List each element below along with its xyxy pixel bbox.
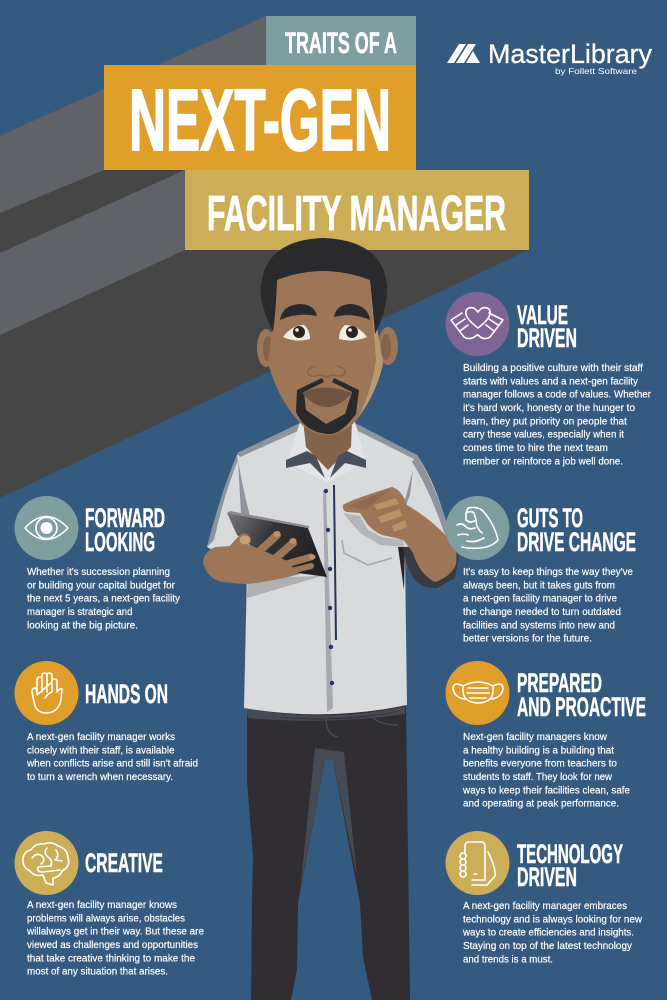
panel: creative [14, 831, 204, 978]
body text: a next-gen facility manager to drive [463, 593, 617, 605]
body text [26, 731, 198, 783]
body text: and operating at peak performance. [463, 798, 619, 810]
icon: flexed bicep [446, 496, 510, 560]
body text: Staying on top of the latest technology [463, 940, 633, 952]
body text: always been, but it takes guts from [463, 579, 615, 591]
body text: Next-gen facility managers know [463, 731, 607, 743]
heading [517, 300, 577, 353]
heading: CREATIVE [85, 848, 163, 878]
panel: guts to drive change [446, 496, 636, 645]
panel: technology driven [446, 831, 642, 965]
ears [257, 327, 398, 367]
body text: to turn a wrench when necessary. [27, 771, 173, 783]
body text: comes time to hire the next team [463, 442, 608, 454]
title block: traits of a [266, 16, 416, 65]
title block: next-gen: NEXT-GEN [129, 72, 391, 169]
title block: facility manager [185, 170, 529, 250]
panel: value driven [446, 292, 651, 467]
body text: a healthy building is a building that [463, 744, 614, 756]
body text: technology and is always looking for new [463, 913, 642, 925]
icon: hands holding a heart [446, 292, 510, 356]
title block: next-gen [104, 65, 416, 170]
body text: benefits everyone from teachers to [463, 758, 617, 770]
body text: carry these values, especially when it [463, 429, 624, 441]
body text: the next 5 years, a next-gen facility [27, 593, 181, 605]
body text: ways to create efficiencies and insights. [462, 927, 634, 939]
body text: facilities and systems into new and [463, 619, 615, 631]
body text: the change needed to turn outdated [463, 606, 621, 618]
body text [463, 566, 633, 645]
panel: prepared and proactive [446, 661, 646, 810]
heading: LOOKING [85, 527, 155, 557]
trousers [247, 705, 410, 1000]
heading [517, 503, 636, 557]
icon: hand [14, 661, 78, 725]
body text: Building a positive culture with their staff [463, 362, 643, 374]
goatee and mouth [296, 378, 359, 434]
heading: GUTS TO [517, 503, 583, 533]
body text: when conflicts arise and still isn't afraid [26, 758, 198, 770]
logo: MasterLibrary: by Follett Software [555, 67, 638, 76]
title [104, 16, 529, 250]
tablet [227, 511, 327, 577]
heading [517, 668, 646, 722]
eyes [283, 325, 367, 341]
body text: Whether it's succession planning [27, 566, 170, 578]
heading: PREPARED [517, 668, 602, 698]
diagonal shadow bands [0, 16, 529, 498]
icon: hand holding a smartphone [446, 831, 510, 895]
body text [27, 566, 181, 631]
body text: closely with their staff, is available [27, 744, 175, 756]
body text: It's easy to keep things the way they've [463, 566, 633, 578]
body text: that take creative thinking to make the [27, 952, 195, 964]
body text: A next-gen facility manager works [27, 731, 175, 743]
body text: starts with values and a next-gen facility [463, 375, 639, 387]
heading: VALUE [517, 300, 568, 330]
body text: or building your capital budget for [27, 579, 175, 591]
body text: better versions for the future. [463, 633, 592, 645]
body text: manager follows a code of values. Whether [463, 389, 651, 401]
heading: DRIVEN [517, 862, 577, 892]
body text [26, 899, 204, 978]
body text: it's hard work, honesty or the hunger to [463, 402, 635, 414]
neck and collar [286, 420, 366, 482]
eyebrows [280, 304, 370, 320]
nose [308, 366, 345, 376]
hair [260, 238, 387, 334]
face [268, 271, 383, 435]
shirt [207, 423, 453, 714]
body text: students to staff. They look for new [463, 771, 612, 783]
icon: brain [14, 831, 78, 895]
icon: face mask [446, 661, 510, 725]
logo: MasterLibrary: MasterLibrary [488, 39, 652, 69]
body text: manager is strategic and [27, 606, 133, 618]
body text [463, 362, 651, 467]
character: facility manager holding a tablet [203, 238, 459, 1000]
body text: learn, they put priority on people that [463, 415, 627, 427]
heading [85, 503, 165, 557]
body text: ways to keep their facilities clean, safe [462, 784, 630, 796]
heading: DRIVEN [517, 323, 577, 353]
hand holding tablet [203, 531, 316, 584]
panel: hands on [14, 661, 198, 783]
body text: A next-gen facility manager knows [27, 899, 177, 911]
heading: HANDS ON [85, 679, 168, 709]
body text: looking at the big picture. [27, 619, 138, 631]
heading [517, 839, 623, 892]
body text: most of any situation that arises. [27, 966, 168, 978]
icon: eye [14, 496, 78, 560]
logo: MasterLibrary [447, 39, 652, 76]
arm pointing [343, 487, 459, 588]
body text [462, 900, 642, 965]
panel: forward looking [14, 496, 181, 631]
body text: willalways get in their way. But these are [26, 926, 204, 938]
body text: A next-gen facility manager embraces [463, 900, 627, 912]
body text: problems will always arise, obstacles [27, 912, 185, 924]
body text: viewed as challenges and opportunities [27, 939, 198, 951]
body text [462, 731, 630, 810]
heading: FORWARD [85, 503, 165, 533]
title block: traits of a: TRAITS OF A [285, 27, 397, 60]
body text: member or reinforce a job well done. [463, 455, 623, 467]
body text: and trends is a must. [463, 953, 553, 965]
